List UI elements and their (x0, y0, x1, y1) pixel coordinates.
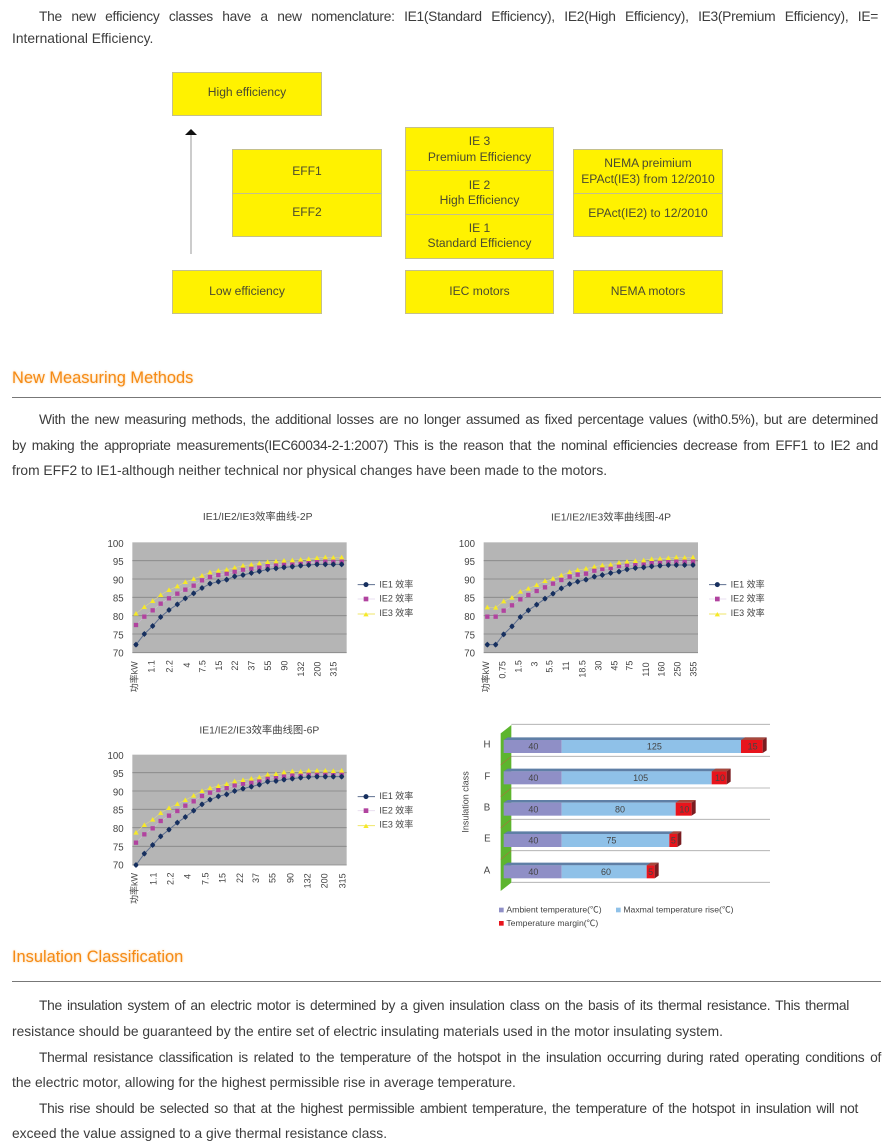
chart: efficiency curve 4P: 70 (464, 649, 475, 660)
chart: efficiency curve 2P: 75 (113, 631, 124, 642)
chart: efficiency curve 6P: 70 (113, 861, 124, 872)
chart: insulation class stacked bars: Insulation class (461, 771, 471, 833)
box: EPAct IE2: EPAct(IE2) to 12/2010 (588, 206, 708, 220)
paragraph: permissible rise (12, 1101, 858, 1141)
bar: class F (504, 769, 731, 784)
paragraph: thermal resistance: the electric motor, allowing for the highest permissible rise in average temperature. (12, 1075, 516, 1090)
bar: class E: 75 (606, 836, 616, 846)
box: high efficiency (172, 72, 322, 116)
bar: class H: 15 (748, 742, 758, 752)
chart: efficiency curve 4P: 5.5 (545, 660, 555, 673)
chart: efficiency curve 6P: 85 (113, 806, 124, 817)
chart: efficiency curve 4P: 75 (464, 631, 475, 642)
chart: efficiency curve 6P: 22 (235, 873, 245, 883)
chart: efficiency curve 2P: IE1 效率 (379, 578, 413, 589)
chart: efficiency curve 2P: 80 (113, 612, 124, 623)
bar: class H: 40 (528, 742, 538, 752)
chart: efficiency curve 4P: 355 (688, 662, 698, 677)
chart: efficiency curve 4P (459, 511, 765, 692)
bar: class B: 80 (615, 804, 625, 814)
chart: efficiency curve 2P: 4 (182, 663, 192, 668)
chart: efficiency curve 2P: 1.1 (146, 660, 156, 673)
chart: efficiency curve 2P: 70 (113, 649, 124, 660)
chart: insulation class stacked bars: E (484, 834, 491, 845)
chart: efficiency curve 6P: 15 (217, 873, 227, 883)
heading: New Measuring Methods: New Measuring Methods (12, 369, 193, 387)
chart: efficiency curve 2P: IE3 效率 (379, 607, 413, 618)
chart: efficiency curve 4P: 80 (464, 612, 475, 623)
chart: efficiency curve 4P: 18.5 (577, 660, 587, 678)
box: low efficiency (172, 270, 322, 314)
chart: efficiency curve 2P: 55 (263, 661, 273, 671)
chart: efficiency curve 4P: 45 (609, 661, 619, 671)
chart: efficiency curve 2P (108, 510, 413, 692)
bar: class H (504, 737, 767, 753)
chart: efficiency curve 6P: 37 (251, 873, 261, 883)
chart: efficiency curve 6P: 200 (320, 873, 330, 888)
chart: efficiency curve 6P: 90 (285, 873, 295, 883)
chart: efficiency curve 4P: 90 (464, 575, 475, 586)
chart: insulation class stacked bars (461, 724, 770, 928)
bar: class H: 125 (647, 742, 662, 752)
box: EFF1 (232, 149, 382, 194)
chart: efficiency curve 6P: 1.1 (149, 872, 159, 885)
chart: efficiency curve 6P: 7.5 (201, 872, 211, 885)
box: IEC motors (405, 270, 554, 314)
paragraph: measuring methods: by making the appropriate measurements(IEC60034-2-1:2007) This is the reason that the nominal efficiencies decrease from EFF1 to IE2 and (12, 438, 878, 453)
chart: insulation class stacked bars: F (484, 771, 490, 782)
paragraph: measuring methods: With the new measuring methods, the additional losses are no longer assumed as fixed percentage values (with0.5%), but are determined (39, 412, 878, 427)
chart: efficiency curve 4P: 110 (641, 662, 651, 677)
chart: efficiency curve 2P: 90 (279, 661, 289, 671)
chart: efficiency curve 4P: 11 (561, 661, 571, 671)
box: NEMA premium: NEMA preimium (604, 156, 692, 170)
box: IE2: IE 2 (469, 178, 490, 192)
chart: efficiency curve 6P: 75 (113, 843, 124, 854)
chart: efficiency curve 4P: 250 (672, 662, 682, 677)
chart: efficiency curve 2P: IE1/IE2/IE3效率曲线-2P (203, 510, 313, 523)
box: NEMA premium: EPAct(IE3) from 12/2010 (581, 172, 715, 186)
box: EPAct IE2 (573, 193, 723, 237)
paragraph: permissible rise: This rise should be selected so that at the highest permissible ambient temperature, the temperature of the hotspot in insulation will not (39, 1101, 858, 1116)
chart: efficiency curve 4P: 160 (656, 662, 666, 677)
chart: efficiency curve 4P: 3 (530, 662, 540, 667)
chart: efficiency curve 4P: 1.5 (514, 660, 524, 673)
box: EFF1: EFF1 (292, 164, 322, 178)
chart: efficiency curve 6P: IE1 效率 (379, 790, 413, 801)
intro paragraph: The new efficiency classes have a new nomenclature: IE1(Standard Efficiency), IE2(High Efficiency), IE3(Premium Efficiency), IE= (39, 9, 878, 24)
box: EFF2: EFF2 (292, 205, 322, 219)
chart: efficiency curve 6P: 2.2 (165, 872, 175, 885)
bar: class E (504, 831, 681, 847)
bar: class E: 5 (671, 836, 676, 846)
chart: efficiency curve 6P (108, 723, 413, 904)
bar: class F: 40 (528, 773, 538, 783)
intro paragraph: International Efficiency. (12, 31, 153, 46)
arrow: low to high efficiency (185, 129, 197, 254)
chart: insulation class stacked bars: H (484, 740, 491, 751)
box: IE3 (405, 127, 554, 171)
box: IE3: IE 3 (469, 134, 490, 148)
efficiency class diagram (172, 72, 723, 314)
chart: insulation class stacked bars: Ambient temperature(℃) (506, 904, 602, 914)
box: IEC motors: IEC motors (449, 284, 510, 298)
chart: efficiency curve 2P: 90 (113, 575, 124, 586)
box: IE2: High Efficiency (440, 193, 519, 207)
bar: class F: 105 (633, 773, 648, 783)
chart: efficiency curve 4P: IE1 效率 (731, 578, 765, 589)
heading: Insulation Classification: Insulation Classification (12, 948, 183, 966)
chart: efficiency curve 2P: 95 (113, 557, 124, 568)
bar: class E: 40 (528, 836, 538, 846)
paragraph: insulation system: The insulation system of an electric motor is determined by a given insulation class on the basis of its thermal resistance. This thermal (39, 998, 849, 1013)
chart: efficiency curve 4P: 30 (593, 661, 603, 671)
bar: class A: 60 (601, 867, 611, 877)
paragraph: thermal resistance: Thermal resistance classification is related to the temperature of the hotspot in the insulation occurring during rated operating conditions of (39, 1050, 881, 1065)
box: IE3: Premium Efficiency (428, 150, 531, 164)
paragraph: measuring methods: from EFF2 to IE1-although neither technical nor physical changes have been made to the motors. (12, 463, 607, 478)
chart: efficiency curve 6P: IE3 效率 (379, 819, 413, 830)
chart: efficiency curve 2P: 37 (247, 661, 257, 671)
chart: efficiency curve 6P: 80 (113, 824, 124, 835)
paragraph: thermal resistance (12, 1050, 882, 1090)
chart: efficiency curve 6P: 功率kW (129, 873, 140, 904)
intro paragraph (12, 9, 878, 46)
chart: efficiency curve 2P: 7.5 (197, 660, 207, 673)
bar: class B (504, 800, 696, 816)
chart: efficiency curve 4P: 0.75 (498, 661, 508, 679)
chart: efficiency curve 2P: 315 (329, 662, 339, 677)
chart: efficiency curve 6P: 4 (183, 874, 193, 879)
chart: efficiency curve 6P: IE1/IE2/IE3效率曲线图-6P (199, 723, 319, 736)
chart: insulation class stacked bars: B (484, 803, 490, 814)
box: high efficiency: High efficiency (208, 85, 286, 99)
bar: class F: 10 (715, 773, 725, 783)
chart: efficiency curve 6P: 90 (113, 787, 124, 798)
box: IE2 (405, 170, 554, 215)
bar: class A: 5 (648, 867, 653, 877)
box: IE1 (405, 214, 554, 259)
chart: efficiency curve 2P: 2.2 (164, 660, 174, 673)
box: NEMA motors: NEMA motors (611, 284, 685, 298)
chart: efficiency curve 4P: IE3 效率 (731, 607, 765, 618)
chart: insulation class stacked bars: Maxmal temperature rise(℃) (623, 904, 734, 914)
chart: efficiency curve 6P: 100 (108, 751, 124, 762)
box: low efficiency: Low efficiency (209, 284, 285, 298)
chart: insulation class stacked bars: A (484, 865, 491, 876)
chart: efficiency curve 2P: 200 (312, 662, 322, 677)
chart: efficiency curve 4P: 100 (459, 539, 475, 550)
chart: efficiency curve 2P: 100 (108, 539, 124, 550)
chart: efficiency curve 2P: 22 (230, 661, 240, 671)
chart: insulation class stacked bars: Temperature margin(℃) (506, 918, 598, 928)
chart: efficiency curve 6P: 55 (268, 873, 278, 883)
chart: efficiency curve 2P: 85 (113, 594, 124, 605)
paragraph: measuring methods (12, 412, 878, 478)
box: IE1: Standard Efficiency (428, 236, 531, 250)
bar: class A (504, 863, 659, 878)
chart: efficiency curve 6P: 132 (302, 873, 312, 888)
chart: efficiency curve 4P: 95 (464, 557, 475, 568)
chart: efficiency curve 4P: 75 (625, 661, 635, 671)
chart: efficiency curve 6P: IE2 效率 (379, 804, 413, 815)
chart: efficiency curve 4P: IE2 效率 (731, 593, 765, 604)
chart: efficiency curve 6P: 95 (113, 769, 124, 780)
box: NEMA motors (573, 270, 723, 314)
chart: efficiency curve 6P: 315 (337, 873, 347, 888)
paragraph: insulation system: resistance should be guaranteed by the entire set of electric insulating materials used in the motor insulating system. (12, 1024, 723, 1039)
bar: class B: 10 (679, 804, 689, 814)
box: IE1: IE 1 (469, 220, 490, 234)
chart: efficiency curve 4P: 功率kW (480, 661, 491, 692)
chart: efficiency curve 4P: 85 (464, 594, 475, 605)
box: NEMA premium (573, 149, 723, 194)
paragraph: insulation system (12, 998, 849, 1039)
chart: efficiency curve 2P: IE2 效率 (379, 593, 413, 604)
chart: efficiency curve 2P: 15 (214, 661, 224, 671)
bar: class B: 40 (528, 804, 538, 814)
box: EFF2 (232, 193, 382, 237)
paragraph: permissible rise: exceed the value assigned to a give thermal resistance class. (12, 1126, 387, 1141)
chart: efficiency curve 2P: 132 (296, 662, 306, 677)
bar: class A: 40 (528, 867, 538, 877)
chart: efficiency curve 4P: IE1/IE2/IE3效率曲线图-4P (551, 511, 671, 524)
chart: efficiency curve 2P: 功率kW (129, 661, 140, 692)
